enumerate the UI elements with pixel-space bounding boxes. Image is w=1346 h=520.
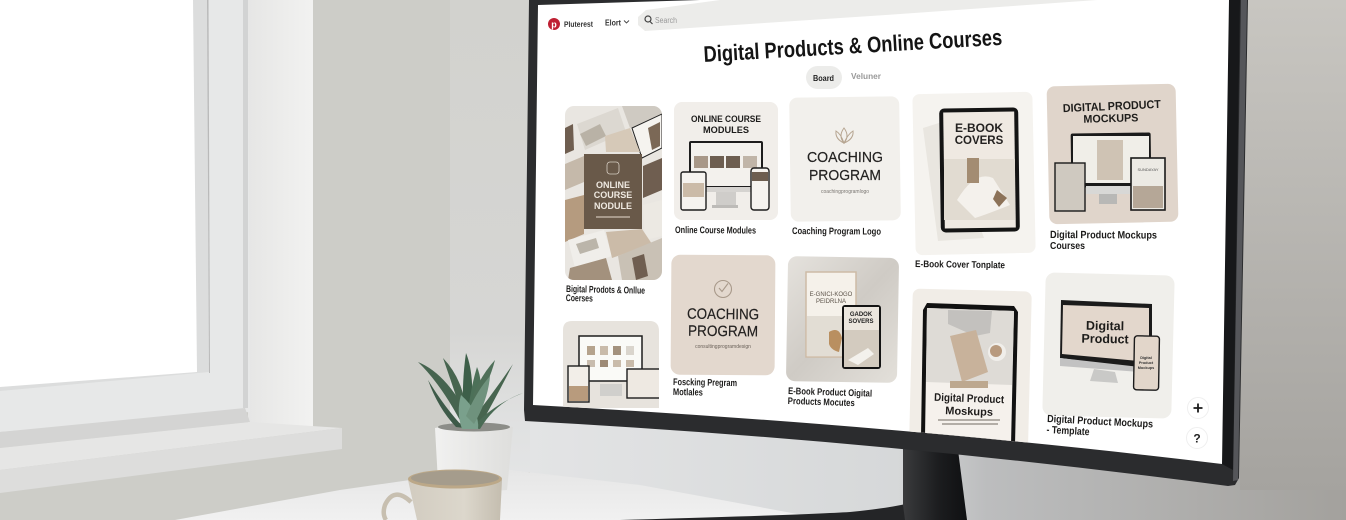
plant pot xyxy=(435,422,513,491)
button: help xyxy=(1186,428,1208,448)
card: online course modules: ONLINE COURSE xyxy=(691,114,761,124)
card: online course module collage: NODULE xyxy=(594,201,632,211)
card: digital product monitor and phone: Product xyxy=(1139,361,1154,365)
caption: e-book cover template: E-Book Cover Tonplate xyxy=(915,259,1005,271)
caption: digital product mockups courses xyxy=(1050,230,1157,249)
nav bar: Pinterest logo and menu xyxy=(548,18,629,30)
card: e-book product: E-GNICI-KOGO xyxy=(810,292,853,298)
card: e-book product: PEIDRLNA xyxy=(816,299,846,305)
monitor bezel xyxy=(524,0,1248,486)
card: coaching program logo: PROGRAM xyxy=(809,167,881,184)
card: online course modules: MODULES xyxy=(703,125,749,135)
caption: e-book product digital: Products Mocutes xyxy=(788,396,855,409)
card: digital product monitor and phone: Mockups xyxy=(1138,366,1154,370)
card: online course module collage: COURSE xyxy=(594,190,632,200)
card: digital product mockups xyxy=(1047,84,1178,224)
desk surface xyxy=(175,470,830,520)
monitor screen xyxy=(533,0,1229,464)
button: help: ? xyxy=(1193,432,1201,446)
card: coaching program: COACHING xyxy=(687,306,759,323)
card: e-book product: SOVERS xyxy=(848,319,874,325)
title: Digital Products & Online Courses xyxy=(703,25,1003,67)
card: digital product monitor and phone xyxy=(1042,272,1175,419)
caption: digital product mockups template: - Template xyxy=(1046,424,1090,438)
monitor stand xyxy=(620,445,967,520)
card: coaching program logo xyxy=(789,96,901,222)
caption: digital products & online courses: Bigital Prodots & Onllue xyxy=(566,284,645,297)
tabs: Board, Veluner xyxy=(806,66,881,89)
plant: aloe leaves xyxy=(418,353,523,429)
card: coaching program logo: coachingprogramlogo xyxy=(821,189,869,195)
card: online course module collage: ONLINE xyxy=(596,180,630,190)
nav bar: Pinterest logo and menu: p xyxy=(551,20,557,30)
card: e-book product xyxy=(786,256,899,383)
card: coaching program: consultingprogramdesign xyxy=(695,344,751,350)
card: online course modules xyxy=(674,102,778,220)
card: e-book covers xyxy=(912,92,1036,255)
caption: e-book product digital xyxy=(788,387,872,406)
card: e-book product: GADOK xyxy=(850,312,873,318)
caption: foscking program modules xyxy=(673,378,737,396)
search bar: Search xyxy=(655,16,677,25)
window sill xyxy=(0,408,342,493)
caption: digital product mockups courses: Courses xyxy=(1050,240,1085,252)
card: lower-left device collage xyxy=(563,321,661,408)
card: e-book covers: COVERS xyxy=(955,135,1004,147)
coffee mug xyxy=(384,470,502,520)
card: digital product monitor and phone: Digital xyxy=(1140,356,1152,360)
card: tablet mockup: Moskups xyxy=(945,405,993,419)
caption: foscking program modules: Motlales xyxy=(673,387,703,399)
card: tablet mockup xyxy=(909,289,1032,451)
caption: digital product mockups template xyxy=(1046,414,1153,436)
button: plus xyxy=(1188,398,1208,418)
caption: digital products & online courses xyxy=(566,285,645,302)
card: digital product mockups: DIGITAL PRODUCT xyxy=(1063,99,1161,115)
card: e-book covers: E-BOOK xyxy=(955,121,1003,135)
nav bar: Pinterest logo and menu: Elort xyxy=(605,18,621,28)
card: online course module collage xyxy=(565,106,662,280)
caption: online course modules: Online Course Modules xyxy=(675,225,756,237)
caption: foscking program modules: Foscking Pregram xyxy=(673,377,737,389)
card: coaching program logo: COACHING xyxy=(807,149,883,166)
tabs: Board, Veluner: Board xyxy=(813,74,834,83)
window frame and glass xyxy=(0,0,250,432)
card: digital product mockups: SUNDAYAY xyxy=(1137,167,1159,172)
card: digital product monitor and phone: Product xyxy=(1081,332,1130,346)
caption: digital product mockups courses: Digital Product Mockups xyxy=(1050,229,1157,242)
caption: digital products & online courses: Coerses xyxy=(566,293,593,305)
card: coaching program: PROGRAM xyxy=(688,323,758,340)
card: tablet mockup: Digital Product xyxy=(934,392,1005,406)
tabs: Board, Veluner: Veluner xyxy=(851,72,881,81)
card: digital product monitor and phone: Digital xyxy=(1086,319,1124,333)
card: coaching program xyxy=(671,255,775,375)
nav bar: Pinterest logo and menu: Pluterest xyxy=(564,20,593,29)
caption: e-book product digital: E-Book Product Oigital xyxy=(788,386,872,400)
caption: digital product mockups template: Digital Product Mockups xyxy=(1047,413,1153,431)
caption: coaching program logo: Coaching Program Logo xyxy=(792,226,881,238)
search bar xyxy=(638,0,1097,31)
card: digital product mockups: MOCKUPS xyxy=(1083,112,1139,126)
